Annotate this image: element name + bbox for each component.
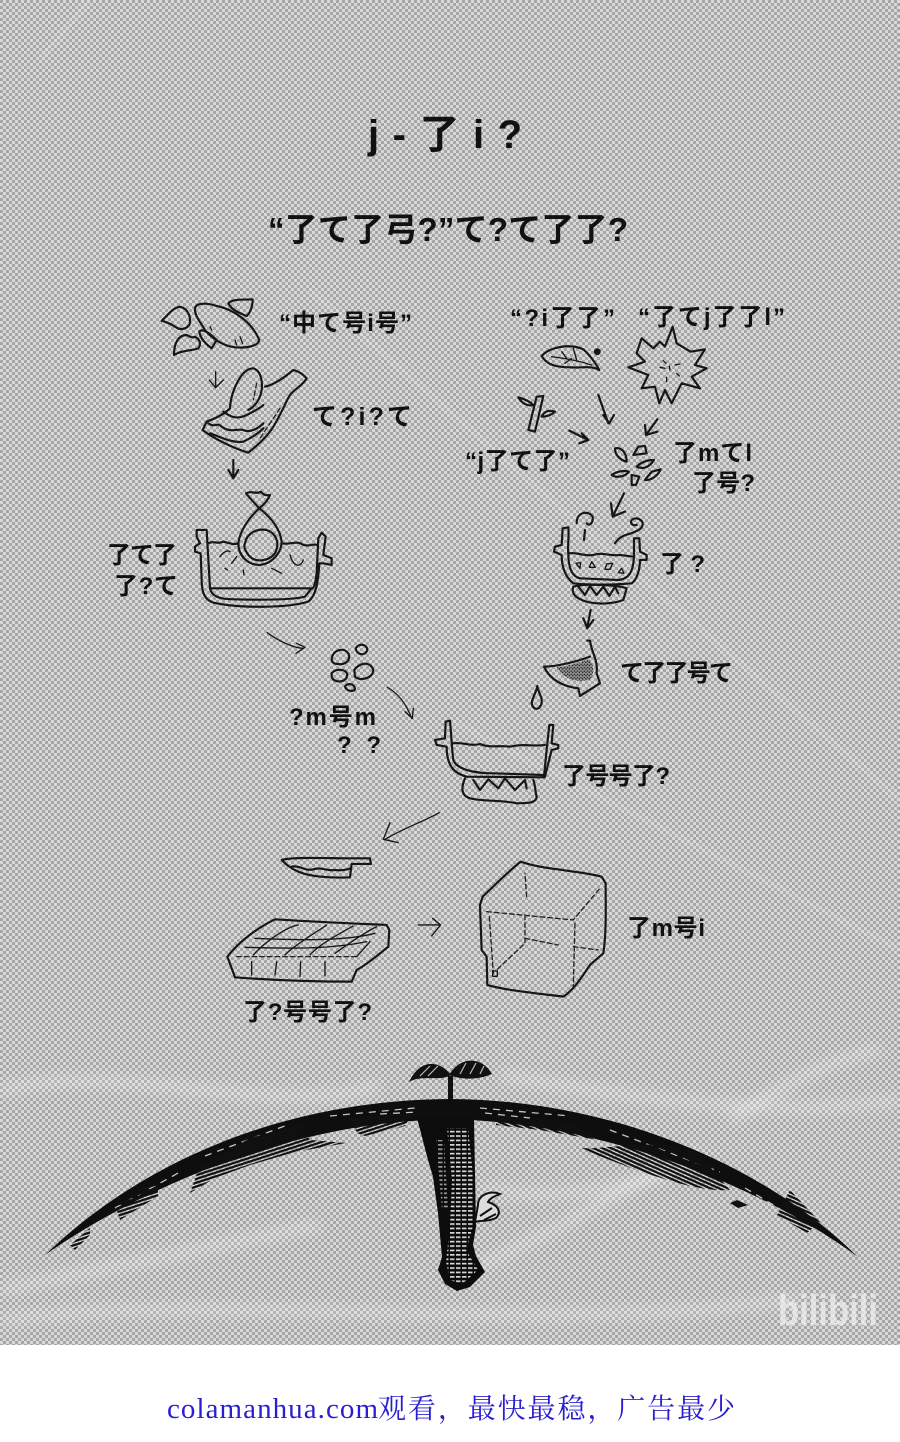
label: chop line two: 了号?	[692, 470, 755, 497]
small root branch	[475, 1193, 500, 1222]
right process column	[518, 327, 707, 709]
arrows to the chopped pile	[569, 395, 657, 443]
label: chop line one: 了mてl	[673, 440, 752, 467]
label: residue line one: ?m号m	[289, 704, 376, 731]
icon: tofu cube	[480, 862, 606, 997]
label: grate: て?i?て	[312, 403, 412, 431]
icon: knife	[282, 858, 371, 878]
root	[417, 1118, 485, 1291]
icon: ladle with drop	[532, 641, 600, 709]
step labels in the invented script	[107, 304, 785, 1026]
arrow: pot to knife	[383, 813, 439, 843]
label: strain line one: 了て了	[107, 542, 177, 569]
arrow: pot to ladle	[583, 610, 593, 628]
sprout leaves and stem	[409, 1061, 492, 1100]
footer caption	[167, 1387, 735, 1427]
icon: pot with cloth bag	[195, 492, 332, 607]
label: sweet potato: “中て号i号”	[279, 310, 412, 337]
icon: scored tofu slab	[227, 919, 389, 982]
footer caption: 观看，最快最稳，广告最少	[378, 1387, 735, 1427]
label: residue line two: ??	[337, 732, 381, 759]
label: simmer: 了号号了?	[562, 763, 670, 790]
soil highlights	[115, 1108, 815, 1230]
illustration: earth arc with sprouting tree and root	[45, 1061, 858, 1291]
recipe subtitle: “了て了弓?”て?て了了?	[268, 211, 628, 248]
label: filter: て了了号て	[620, 660, 733, 687]
icon: grater with potato	[203, 368, 307, 453]
icon: spiky star anise	[628, 327, 707, 403]
lower process row	[227, 633, 606, 997]
arrow: pot to residue	[267, 633, 305, 653]
icon: bamboo	[518, 396, 555, 432]
icon: sweet potato with leaves	[162, 299, 259, 355]
arrow: fragments to pot	[611, 493, 625, 517]
arrow: grater to pot	[228, 460, 238, 478]
label: boil: 了?	[660, 551, 705, 578]
page title: j-了i?	[367, 113, 522, 157]
arrow: potato to grater	[209, 372, 223, 388]
arrow: residue to boiling pot	[387, 687, 413, 718]
label: spice ingredient: “了てj了了l”	[638, 304, 785, 331]
left process column	[162, 299, 332, 607]
watermark: bilibili: bilibili	[778, 1285, 878, 1334]
label: tofu: 了m号i	[627, 915, 705, 942]
icon: chopped fragments	[612, 446, 661, 485]
icon: boiling pot over fire	[435, 721, 558, 803]
label: leaf ingredient: “?i了了”	[510, 305, 615, 332]
arrow: slab to cube	[418, 918, 441, 936]
label: strain line two: 了?て	[114, 573, 178, 600]
label: cut: 了?号号了?	[243, 999, 372, 1026]
icon: steaming pot over fire	[554, 513, 647, 604]
white footer strip	[0, 1345, 900, 1442]
label: bamboo ingredient: “j了て了”	[465, 448, 570, 475]
icon: leaf	[542, 346, 600, 370]
ground band	[45, 1099, 858, 1257]
soil hatching	[70, 1114, 820, 1250]
icon: residue lumps	[332, 645, 373, 691]
footer caption: colamanhua.com	[167, 1393, 378, 1425]
